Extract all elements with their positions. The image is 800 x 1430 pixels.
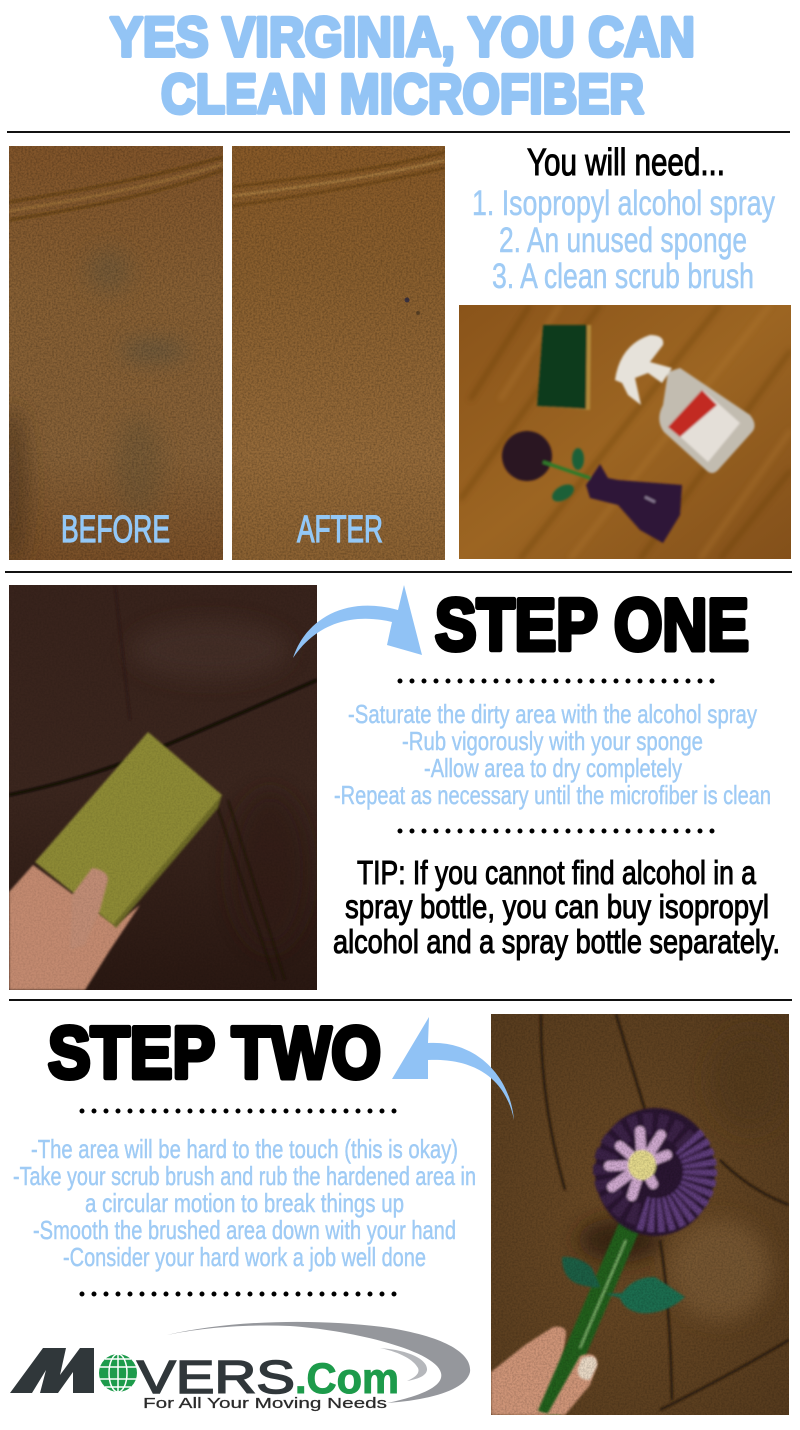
icon: hand finger <box>491 1327 566 1415</box>
dotted divider <box>400 678 716 684</box>
logo globe <box>99 1354 137 1392</box>
dotted divider <box>82 1108 398 1114</box>
photo: scrub brush on couch <box>491 1014 789 1415</box>
logo: Movers.Com: .Com <box>295 1355 399 1403</box>
icon: yellow sponge <box>35 732 222 928</box>
arrow: to step two <box>392 1017 514 1120</box>
icon: green sponge <box>537 325 591 410</box>
icon: purple flower brush <box>595 1108 715 1236</box>
logo M <box>10 1348 94 1393</box>
title: YES VIRGINIA, YOU CAN <box>110 5 695 68</box>
dotted divider <box>400 828 716 834</box>
step one instructions <box>334 699 771 810</box>
icon: alcohol spray bottle <box>615 335 755 473</box>
logo tagline: For All Your Moving Needs <box>143 1395 387 1412</box>
step two instructions: -The area will be hard to the touch (this is okay) <box>31 1134 458 1164</box>
step two instructions: a circular motion to break things up <box>85 1188 404 1218</box>
step two instructions: -Consider your hard work a job well done <box>63 1242 426 1272</box>
step one instructions: -Rub vigorously with your sponge <box>402 726 703 756</box>
you will need list: You will need... <box>527 142 725 184</box>
heading: step two: STEP TWO <box>48 1013 381 1094</box>
icon: thumb <box>70 868 108 950</box>
logo inner swoosh <box>380 1348 427 1381</box>
photo: sponge on couch <box>9 585 317 990</box>
title: CLEAN MICROFIBER <box>161 62 644 125</box>
logo wordmark: VERS <box>137 1351 295 1403</box>
step two instructions: -Take your scrub brush and rub the hardened area in <box>13 1161 476 1191</box>
logo swoosh <box>167 1322 470 1403</box>
photo: after <box>232 146 445 560</box>
tip <box>333 854 780 960</box>
photo: supplies <box>459 305 791 559</box>
step one instructions: -Allow area to dry completely <box>424 753 682 783</box>
icon: hand thumb <box>491 1354 597 1415</box>
arrow: to step one <box>293 585 422 658</box>
title <box>110 5 695 125</box>
step two instructions <box>13 1134 476 1272</box>
heading: step one: STEP ONE <box>435 585 749 666</box>
icon: green stem and leaves <box>548 1225 685 1415</box>
label: after: AFTER <box>297 509 383 551</box>
icon: hand <box>9 865 140 990</box>
photo: before <box>9 146 223 560</box>
step two instructions: -Smooth the brushed area down with your hand <box>33 1215 456 1245</box>
logo: Movers.Com <box>10 1322 470 1412</box>
you will need list <box>472 142 775 296</box>
label: before: BEFORE <box>61 509 170 551</box>
dotted divider <box>82 1292 398 1296</box>
icon: scrub brush <box>502 431 682 543</box>
